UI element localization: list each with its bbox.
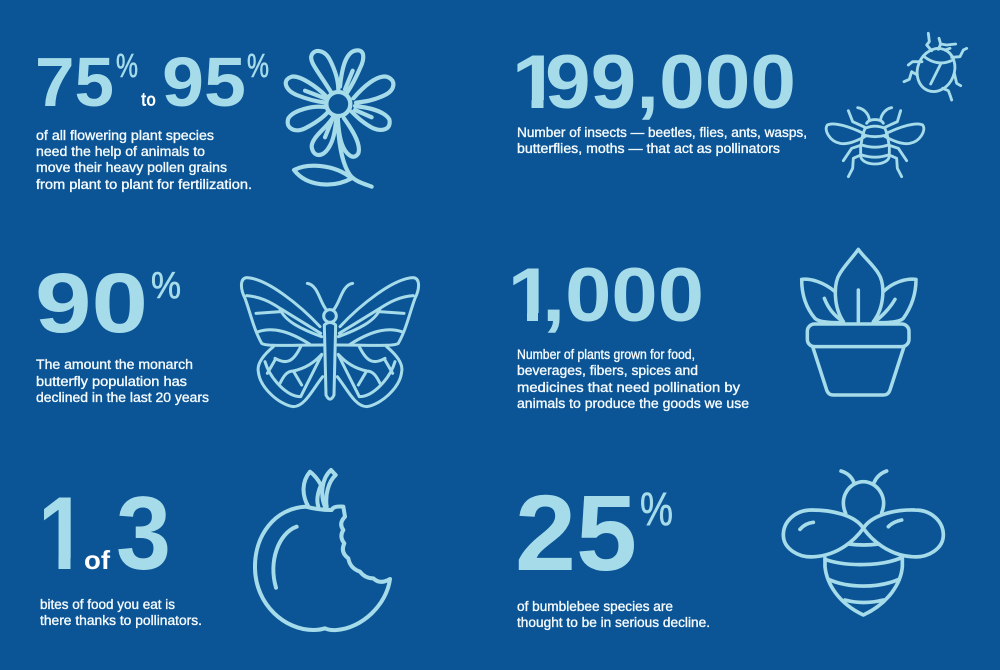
text: food plants description: medicines that need pollination by <box>517 380 740 395</box>
number: 199,000: 1 <box>512 40 560 125</box>
text: flowering plant description: of all flowering plant species <box>36 128 214 143</box>
text: bites description: bites of food you eat is <box>40 597 175 612</box>
panel: bites of food stat <box>32 470 390 630</box>
text: food plants description <box>517 347 749 411</box>
icon: beetle <box>904 33 967 100</box>
text: food plants description: Number of plants grown for food, <box>517 347 695 362</box>
number: 75 percent to 95 percent <box>35 43 269 121</box>
text: monarch description: declined in the last 20 years <box>36 390 209 405</box>
text: bites description <box>40 597 202 628</box>
icon: bumble bee with wings <box>826 108 924 177</box>
text: bumblebee description: thought to be in serious decline. <box>517 615 710 630</box>
text: flowering plant description: move their heavy pollen grains <box>36 160 227 175</box>
text: bumblebee description <box>517 599 710 630</box>
number: 75 percent to 95 percent: to <box>141 90 156 111</box>
text: monarch description: butterfly population has <box>36 374 187 389</box>
icon: butterfly <box>241 278 419 407</box>
number: 1 of 3: 3 <box>116 476 171 592</box>
text: bumblebee description: of bumblebee species are <box>517 599 673 614</box>
number: 90 percent: % <box>151 265 181 307</box>
panel: monarch butterfly stat <box>35 256 419 407</box>
panel: food plants stat <box>503 249 916 411</box>
text: insects description: butterflies, moths — that act as pollinators <box>517 141 780 156</box>
number: 1,000: ,000 <box>542 253 704 338</box>
text: food plants description: beverages, fibers, spices and <box>517 363 698 378</box>
number: 1 of 3: 1 <box>38 476 87 592</box>
number: 1,000: 1 <box>508 253 554 338</box>
text: insects description: Number of insects — beetles, flies, ants, wasps, <box>517 125 807 140</box>
text: flowering plant description: from plant to plant for fertilization. <box>36 177 252 192</box>
text: bites description: there thanks to pollinators. <box>40 613 202 628</box>
icon: bee <box>783 471 943 615</box>
number: 90 percent <box>35 256 181 350</box>
text: flowering plant description <box>36 128 252 192</box>
text: food plants description: animals to produce the goods we use <box>517 396 749 411</box>
text: flowering plant description: need the help of animals to <box>36 144 205 159</box>
icon: bitten apple <box>255 470 390 630</box>
number: 25 percent: 25 <box>515 472 637 593</box>
icon: flower <box>286 50 393 187</box>
number: 1 of 3 <box>32 476 171 592</box>
number: 75 percent to 95 percent: 75 <box>35 43 114 121</box>
number: 199,000: 99,000 <box>545 40 796 125</box>
panel: flowering plants stat <box>35 43 393 192</box>
panel: bumblebee stat <box>515 471 943 630</box>
panel: insect pollinators stat <box>503 33 967 177</box>
number: 25 percent: % <box>640 482 673 535</box>
number: 90 percent: 90 <box>35 256 148 350</box>
number: 75 percent to 95 percent: 95 <box>162 43 246 121</box>
icon: potted plant <box>802 249 916 395</box>
number: 75 percent to 95 percent: % <box>247 47 269 84</box>
text: monarch description: The amount the monarch <box>36 357 193 372</box>
text: insects description <box>517 125 807 156</box>
number: 75 percent to 95 percent: % <box>116 47 138 84</box>
number: 1 of 3: of <box>84 545 110 575</box>
text: monarch description <box>36 357 209 405</box>
